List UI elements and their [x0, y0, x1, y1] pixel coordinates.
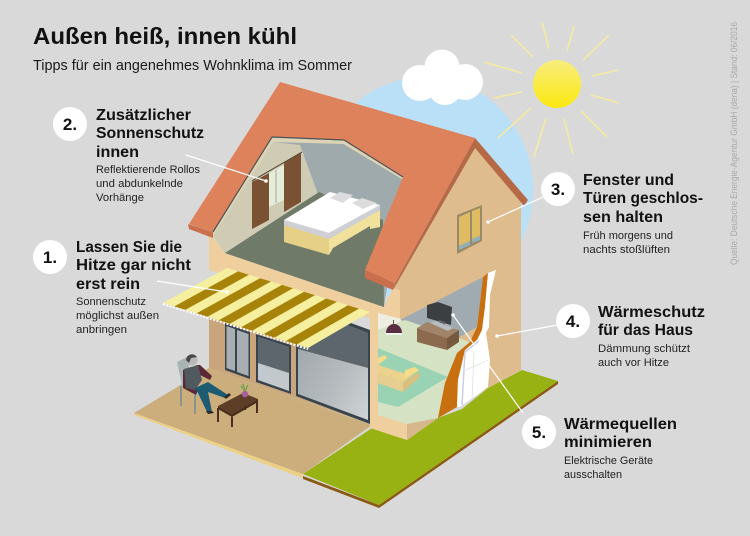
curtains: [252, 153, 301, 229]
chair: [177, 357, 200, 414]
callout 2: [53, 107, 204, 204]
icon: cloud: [402, 50, 483, 105]
large window with shutter: [296, 303, 370, 424]
callout 3: nachts stoßlüften: [583, 244, 670, 256]
callout 1: Sonnenschutz: [76, 296, 146, 308]
hanging lamp: [386, 320, 402, 334]
callout 1: 1.: [43, 248, 57, 267]
grass lawn: [303, 370, 558, 508]
roof: [188, 82, 528, 290]
callout 1: [33, 239, 191, 336]
callout 1: möglichst außen: [76, 310, 159, 322]
callout 3: 3.: [551, 180, 565, 199]
leader dots: [225, 179, 499, 338]
tv stand: [417, 322, 459, 350]
house: outer right wall: [393, 148, 521, 418]
callout 5: minimieren: [564, 434, 652, 451]
window in gable wall: [457, 205, 482, 254]
callout 4: Wärmeschutz: [598, 304, 705, 321]
callout 3: Türen geschlos-: [583, 190, 703, 207]
callout 4: [556, 304, 705, 369]
callout 2: Zusätzlicher: [96, 107, 191, 124]
sky semicircle: [317, 77, 533, 303]
attic room: [212, 138, 404, 307]
callout 1: Hitze gar nicht: [76, 257, 191, 274]
callout 5: 5.: [532, 423, 546, 442]
glass door: [225, 323, 250, 379]
awning: [163, 268, 370, 349]
callout 2: innen: [96, 144, 139, 161]
head: [186, 354, 198, 366]
leader lines: [157, 155, 558, 413]
bed: [284, 192, 380, 255]
roof trim: [212, 140, 404, 234]
attic gable wall: [213, 142, 319, 253]
source note: Quelle: Deutsche Energie-Agentur GmbH (dena) | Stand: 06/2016: [729, 22, 739, 265]
icon: sun with rays: [484, 22, 619, 157]
television: [427, 302, 453, 331]
arms and torso: [183, 368, 198, 395]
house: peach slab and corner column: [209, 232, 438, 440]
callout 4: für das Haus: [598, 322, 693, 339]
living room interior: [378, 277, 483, 424]
rug: [378, 348, 448, 407]
callout 2: 2.: [63, 115, 77, 134]
callout 2: Sonnenschutz: [96, 125, 204, 142]
terrace floor: [134, 368, 372, 478]
callout 5: Wärmequellen: [564, 416, 677, 433]
callout 5: Elektrische Geräte: [564, 455, 653, 467]
callout 5: ausschalten: [564, 469, 622, 481]
callout 1: erst rein: [76, 276, 140, 293]
callout 3: [541, 172, 703, 256]
icon: wall insulation layers: [438, 270, 496, 418]
title: Außen heiß, innen kühl: [33, 23, 297, 49]
callout 4: Dämmung schützt: [598, 343, 690, 355]
callout 1: Lassen Sie die: [76, 239, 182, 256]
callout 2: Reflektierende Rollos: [96, 164, 200, 176]
callout 4: 4.: [566, 312, 580, 331]
terrace back wall: [209, 300, 370, 424]
callout 4: auch vor Hitze: [598, 357, 669, 369]
coffee table with plant: [218, 384, 258, 427]
window with half-closed shutter: [256, 334, 291, 394]
callout 3: Fenster und: [583, 172, 674, 189]
callout 2: und abdunkelnde: [96, 178, 183, 190]
subtitle: Tipps für ein angenehmes Wohnklima im Sommer: [33, 57, 352, 74]
callout 5: [522, 415, 677, 481]
person sitting on chair: [177, 354, 231, 414]
legs: [195, 382, 228, 412]
window: [252, 152, 302, 207]
attic floor: [225, 192, 384, 307]
callout 2: Vorhänge: [96, 192, 144, 204]
callout 1: anbringen: [76, 324, 127, 336]
callout 3: sen halten: [583, 209, 663, 226]
sofa: [378, 355, 419, 392]
callout 3: Früh morgens und: [583, 230, 673, 242]
